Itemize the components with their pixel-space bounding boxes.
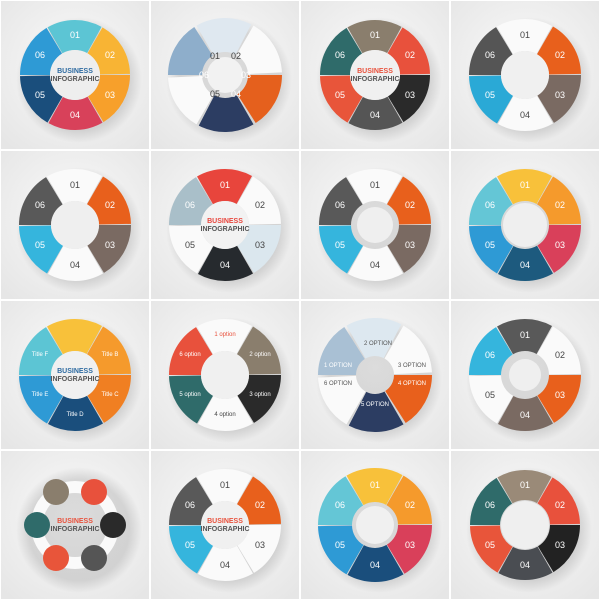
panel: cell 9 hexagon titles: BUSINESS <box>57 368 93 375</box>
panel: cell 13 circles ring <box>1 451 149 599</box>
panel: cell 6 options ring: 03 <box>255 240 265 250</box>
panel: cell 1 business infographic ring: 05 <box>35 90 45 100</box>
panel: cell 8 colorful swirl: 03 <box>555 240 565 250</box>
panel: cell 2 petals: 03 <box>241 70 251 80</box>
panel: cell 13 circles ring: BUSINESS <box>57 518 93 525</box>
panel: cell 15 pentagon-ish ring <box>301 451 449 599</box>
panel: cell 12 wave ring: 02 <box>555 350 565 360</box>
panel: cell 11 triangles options: 6 OPTION <box>324 381 352 387</box>
panel: cell 1 business infographic ring: 06 <box>35 50 45 60</box>
panel: cell 10 options hexagon: 3 option <box>249 392 271 398</box>
panel: cell 1 business infographic ring: BUSINESS <box>57 68 93 75</box>
panel: cell 11 triangles options: 3 OPTION <box>398 363 426 369</box>
panel: cell 15 pentagon-ish ring: 04 <box>370 560 380 570</box>
panel: cell 14 ring <box>151 451 299 599</box>
panel: cell 2 petals: 01 <box>210 51 220 61</box>
panel: cell 5 swirl <box>1 151 149 299</box>
panel: cell 4 ring <box>451 1 599 149</box>
panel: cell 2 petals: 02 <box>231 51 241 61</box>
panel: cell 16 wave ring: 03 <box>555 540 565 550</box>
panel: cell 10 options hexagon: 5 option <box>179 392 201 398</box>
panel: cell 9 hexagon titles <box>1 301 149 449</box>
panel: cell 6 options ring: BUSINESS <box>207 218 243 225</box>
panel: cell 2 petals: 05 <box>210 89 220 99</box>
panel: cell 8 colorful swirl: 01 <box>520 180 530 190</box>
panel: cell 6 options ring: 01 <box>220 180 230 190</box>
panel: cell 7 swirl: 03 <box>405 240 415 250</box>
panel: cell 9 hexagon titles: Title C <box>101 392 119 398</box>
panel: cell 3 hexagon ring: 01 <box>370 30 380 40</box>
panel: cell 5 swirl: 02 <box>105 200 115 210</box>
panel: cell 16 wave ring: 04 <box>520 560 530 570</box>
panel: cell 14 ring: BUSINESS <box>207 518 243 525</box>
panel: cell 5 swirl: 03 <box>105 240 115 250</box>
panel: cell 12 wave ring: 05 <box>485 390 495 400</box>
panel: cell 9 hexagon titles: Title E <box>32 392 48 398</box>
panel: cell 4 ring: 06 <box>485 50 495 60</box>
panel: cell 3 hexagon ring <box>301 1 449 149</box>
panel: cell 2 petals: 04 <box>231 89 241 99</box>
panel: cell 1 business infographic ring <box>1 1 149 149</box>
panel: cell 9 hexagon titles: Title B <box>102 352 118 358</box>
panel: cell 8 colorful swirl <box>451 151 599 299</box>
panel: cell 7 swirl: 06 <box>335 200 345 210</box>
panel: cell 7 swirl: 05 <box>335 240 345 250</box>
panel: cell 14 ring: 02 <box>255 500 265 510</box>
panel: cell 8 colorful swirl: 04 <box>520 260 530 270</box>
panel: cell 3 hexagon ring: 03 <box>405 90 415 100</box>
panel: cell 16 wave ring: 06 <box>485 500 495 510</box>
panel: cell 3 hexagon ring: BUSINESS <box>357 68 393 75</box>
panel: cell 4 ring: 01 <box>520 30 530 40</box>
panel: cell 12 wave ring: 03 <box>555 390 565 400</box>
panel: cell 15 pentagon-ish ring: 03 <box>405 540 415 550</box>
panel: cell 6 options ring: 02 <box>255 200 265 210</box>
panel: cell 9 hexagon titles: Title F <box>32 352 49 358</box>
panel: cell 6 options ring <box>151 151 299 299</box>
panel: cell 4 ring: 02 <box>555 50 565 60</box>
panel: cell 15 pentagon-ish ring: 06 <box>335 500 345 510</box>
panel: cell 10 options hexagon: 4 option <box>214 412 236 418</box>
panel: cell 1 business infographic ring: 02 <box>105 50 115 60</box>
panel: cell 1 business infographic ring: 01 <box>70 30 80 40</box>
panel: cell 12 wave ring: 04 <box>520 410 530 420</box>
panel: cell 16 wave ring: 01 <box>520 480 530 490</box>
panel: cell 16 wave ring: 05 <box>485 540 495 550</box>
panel: cell 11 triangles options <box>301 301 449 449</box>
panel: cell 3 hexagon ring: 02 <box>405 50 415 60</box>
panel: cell 7 swirl <box>301 151 449 299</box>
panel: cell 15 pentagon-ish ring: 05 <box>335 540 345 550</box>
panel: cell 6 options ring: 06 <box>185 200 195 210</box>
panel: cell 7 swirl: 01 <box>370 180 380 190</box>
panel: cell 10 options hexagon: 2 option <box>249 352 271 358</box>
panel: cell 10 options hexagon <box>151 301 299 449</box>
panel: cell 2 petals: 06 <box>199 70 209 80</box>
panel: cell 10 options hexagon: 6 option <box>179 352 201 358</box>
panel: cell 5 swirl: 01 <box>70 180 80 190</box>
panel: cell 4 ring: 04 <box>520 110 530 120</box>
panel: cell 3 hexagon ring: INFOGRAPHIC <box>350 76 400 83</box>
panel: cell 10 options hexagon: 1 option <box>214 332 236 338</box>
panel: cell 15 pentagon-ish ring: 01 <box>370 480 380 490</box>
panel: cell 14 ring: 01 <box>220 480 230 490</box>
panel: cell 5 swirl: 06 <box>35 200 45 210</box>
panel: cell 12 wave ring: 06 <box>485 350 495 360</box>
panel: cell 5 swirl: 04 <box>70 260 80 270</box>
panel: cell 11 triangles options: 1 OPTION <box>324 363 352 369</box>
panel: cell 5 swirl: 05 <box>35 240 45 250</box>
panel: cell 11 triangles options: 5 OPTION <box>361 402 389 408</box>
panel: cell 7 swirl: 04 <box>370 260 380 270</box>
panel: cell 12 wave ring: 01 <box>520 330 530 340</box>
panel: cell 4 ring: 05 <box>485 90 495 100</box>
panel: cell 6 options ring: 04 <box>220 260 230 270</box>
panel: cell 7 swirl: 02 <box>405 200 415 210</box>
panel: cell 13 circles ring: INFOGRAPHIC <box>50 526 100 533</box>
panel: cell 8 colorful swirl: 02 <box>555 200 565 210</box>
panel: cell 6 options ring: 05 <box>185 240 195 250</box>
panel: cell 9 hexagon titles: Title D <box>66 412 84 418</box>
panel: cell 14 ring: INFOGRAPHIC <box>200 526 250 533</box>
panel: cell 1 business infographic ring: 04 <box>70 110 80 120</box>
panel: cell 9 hexagon titles: INFOGRAPHIC <box>50 376 100 383</box>
panel: cell 12 wave ring <box>451 301 599 449</box>
panel: cell 8 colorful swirl: 05 <box>485 240 495 250</box>
panel: cell 4 ring: 03 <box>555 90 565 100</box>
panel: cell 3 hexagon ring: 04 <box>370 110 380 120</box>
panel: cell 14 ring: 03 <box>255 540 265 550</box>
panel: cell 14 ring: 05 <box>185 540 195 550</box>
panel: cell 14 ring: 06 <box>185 500 195 510</box>
panel: cell 14 ring: 04 <box>220 560 230 570</box>
panel: cell 2 petals <box>151 1 299 149</box>
panel: cell 15 pentagon-ish ring: 02 <box>405 500 415 510</box>
panel: cell 16 wave ring <box>451 451 599 599</box>
panel: cell 3 hexagon ring: 06 <box>335 50 345 60</box>
panel: cell 3 hexagon ring: 05 <box>335 90 345 100</box>
panel: cell 11 triangles options: 4 OPTION <box>398 381 426 387</box>
panel: cell 6 options ring: INFOGRAPHIC <box>200 226 250 233</box>
panel: cell 1 business infographic ring: 03 <box>105 90 115 100</box>
panel: cell 8 colorful swirl: 06 <box>485 200 495 210</box>
panel: cell 16 wave ring: 02 <box>555 500 565 510</box>
panel: cell 1 business infographic ring: INFOGRAPHIC <box>50 76 100 83</box>
panel: cell 11 triangles options: 2 OPTION <box>364 341 392 347</box>
